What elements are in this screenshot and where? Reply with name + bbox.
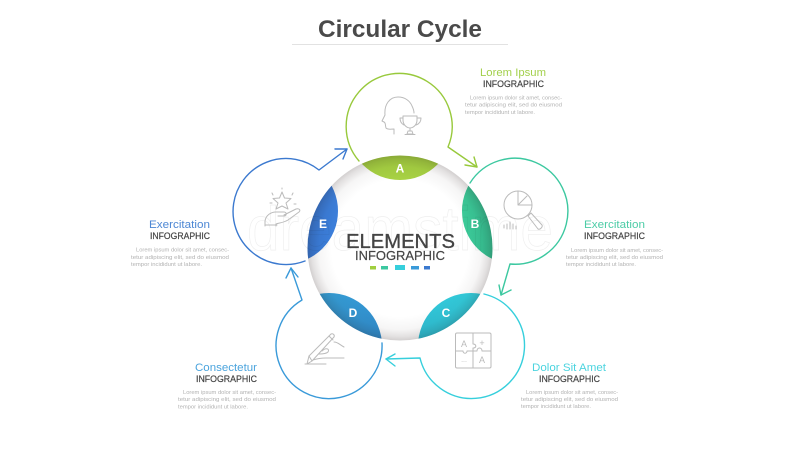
text block: Consectetur: tempor incididunt ut labore. xyxy=(178,404,248,410)
text block: Consectetur: Lorem ipsum dolor sit amet, consec- xyxy=(183,390,276,396)
text block: Exercitation left: INFOGRAPHIC xyxy=(150,231,210,241)
segment C xyxy=(418,293,480,339)
text block: Exercitation right: INFOGRAPHIC xyxy=(584,231,645,241)
ring D with arrow xyxy=(276,268,382,399)
text block: Dolor Sit Amet: Dolor Sit Amet xyxy=(532,362,606,374)
icon: head and trophy xyxy=(382,97,421,134)
segment letters: D xyxy=(349,306,358,320)
watermark: dreamstime xyxy=(247,195,553,264)
segment letters: A xyxy=(396,162,405,176)
text block: Lorem Ipsum: tempor incididunt ut labore. xyxy=(465,110,535,116)
text block: Exercitation left: tetur adipiscing elit, sed do eiusmod xyxy=(131,255,229,261)
central circle xyxy=(308,156,492,340)
center heading: ELEMENTS xyxy=(346,231,455,253)
text block: Exercitation left: Lorem ipsum dolor sit amet, consec- xyxy=(136,248,229,254)
center heading: INFOGRAPHIC xyxy=(355,249,445,263)
text block: Exercitation left xyxy=(131,219,229,268)
text block: Consectetur: INFOGRAPHIC xyxy=(196,374,257,384)
text block: Consectetur: tetur adipiscing elit, sed do eiusmod xyxy=(178,397,276,403)
segment A xyxy=(362,156,438,180)
ring B with arrow xyxy=(470,158,568,295)
text block: Dolor Sit Amet: Lorem ipsum dolor sit amet, consec- xyxy=(526,390,618,396)
text block: Consectetur xyxy=(178,362,276,410)
text block: Exercitation right xyxy=(566,219,663,268)
segment letters: B xyxy=(471,217,480,231)
text block: Exercitation right: tetur adipiscing elit, sed do eiusmod xyxy=(566,255,663,261)
text block: Exercitation right: Exercitation xyxy=(584,219,645,231)
icon: star over hand xyxy=(265,188,300,226)
text block: Dolor Sit Amet: tetur adipiscing elit, sed do eiusmod xyxy=(521,397,618,403)
text block: Exercitation right: tempor incididunt ut labore. xyxy=(566,262,636,268)
center heading xyxy=(346,231,455,263)
icon: puzzle: ... xyxy=(461,357,467,364)
ring E with arrow xyxy=(233,149,347,265)
ring C with arrow xyxy=(386,294,525,399)
icon: puzzle: + xyxy=(479,338,485,348)
segment letters: C xyxy=(442,306,451,320)
icon: puzzle: A xyxy=(479,355,485,365)
text block: Exercitation left: Exercitation xyxy=(149,219,210,231)
color key squares xyxy=(370,265,430,270)
ring A with arrow xyxy=(346,73,477,167)
icon: puzzle: A xyxy=(461,339,467,349)
text block: Lorem Ipsum: Lorem ipsum dolor sit amet, consec- xyxy=(470,96,562,102)
segment D xyxy=(320,293,382,339)
text block: Exercitation right: Lorem ipsum dolor sit amet, consec- xyxy=(571,248,663,254)
text block: Consectetur: Consectetur xyxy=(195,362,257,374)
text block: Lorem Ipsum xyxy=(465,67,562,116)
text block: Exercitation left: tempor incididunt ut labore. xyxy=(131,262,202,268)
text block: Dolor Sit Amet: tempor incididunt ut labore. xyxy=(521,404,591,410)
segment B xyxy=(462,186,492,259)
icon: puzzle xyxy=(456,333,491,368)
segment letters xyxy=(319,162,480,320)
text block: Dolor Sit Amet xyxy=(521,362,618,410)
text block: Dolor Sit Amet: INFOGRAPHIC xyxy=(539,374,600,384)
title: Circular Cycle xyxy=(318,16,482,43)
text block: Lorem Ipsum: INFOGRAPHIC xyxy=(483,79,544,89)
segment E xyxy=(308,186,338,259)
icon: hand with pen xyxy=(305,334,344,364)
segment letters: E xyxy=(319,217,327,231)
text block: Lorem Ipsum: tetur adipiscing elit, sed do eiusmod xyxy=(465,102,562,108)
text block: Lorem Ipsum: Lorem Ipsum xyxy=(480,67,546,79)
icon: pie chart magnifier xyxy=(504,191,542,229)
